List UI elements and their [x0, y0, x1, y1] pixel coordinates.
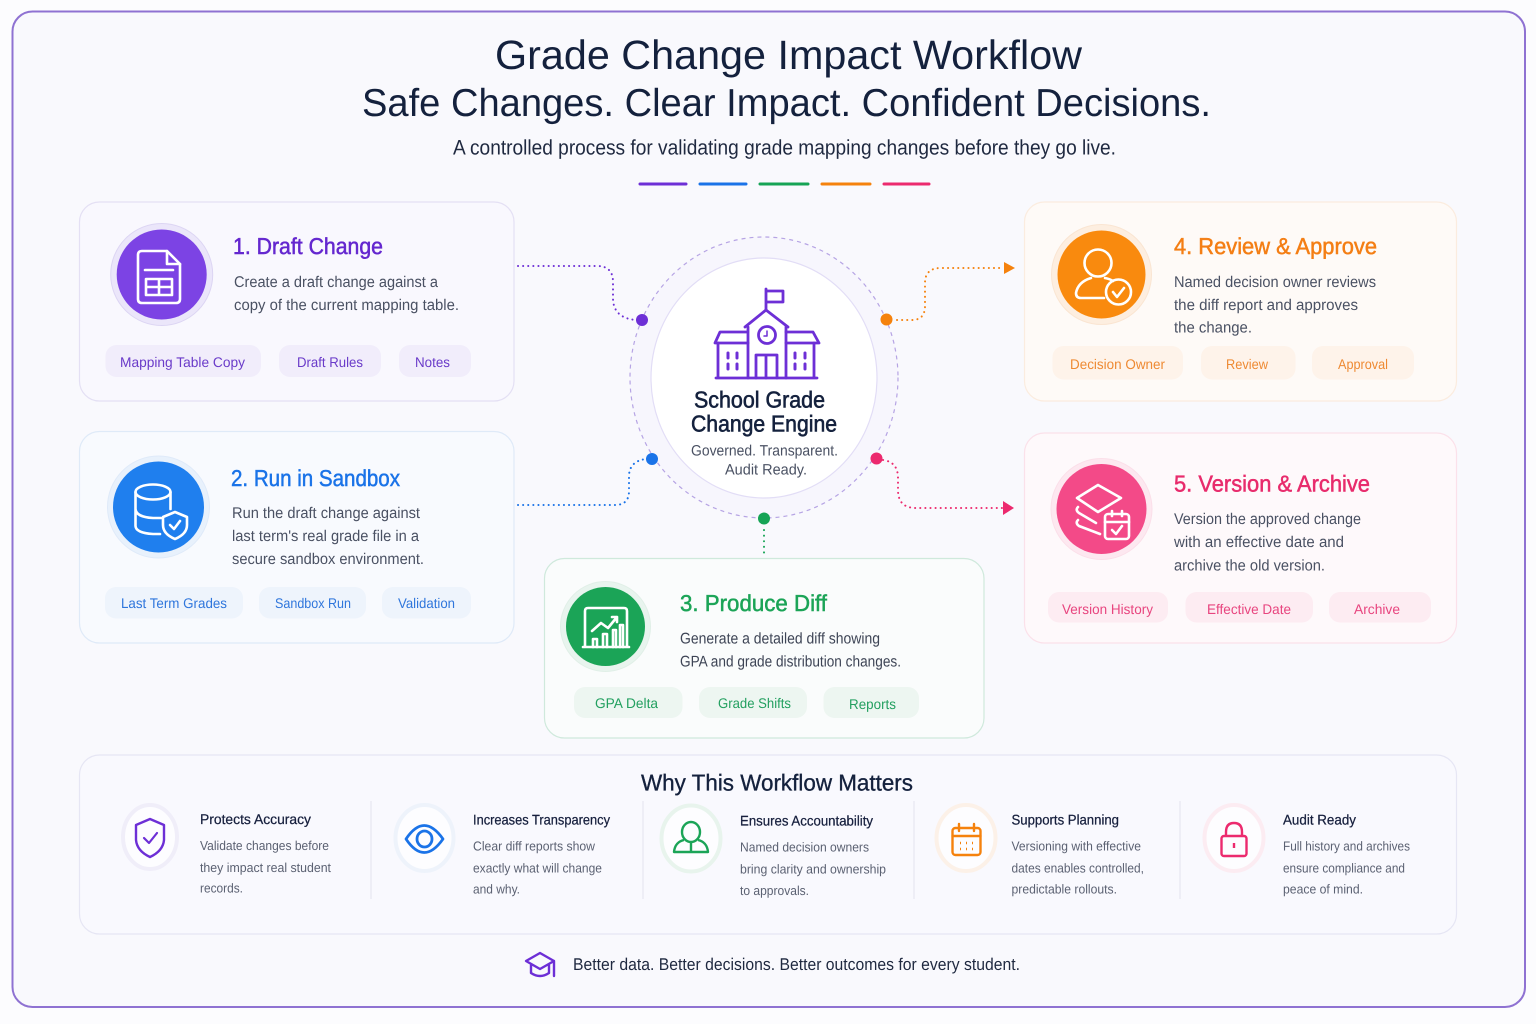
tags: Grade Shifts: [718, 695, 791, 711]
benefit: Increases Transparency: exactly what will change: [473, 860, 602, 876]
hub tagline: Governed. Transparent.: [691, 442, 838, 460]
description: [1174, 274, 1376, 336]
arrow: hub to Review & Approve: [880, 262, 1015, 326]
section heading: Why This Workflow Matters: [641, 770, 913, 796]
description: Create a draft change against a: [234, 274, 438, 291]
benefit: Supports Planning: predictable rollouts.: [1012, 882, 1117, 896]
panel: Why This Workflow Matters: [80, 755, 1456, 934]
icon: database with shield: [108, 456, 210, 558]
description: [680, 630, 901, 670]
tags: Approval: [1338, 356, 1388, 372]
description: Named decision owner reviews: [1174, 274, 1376, 291]
benefit: Protects Accuracy: Protects Accuracy: [200, 811, 311, 827]
title block: Safe Changes. Clear Impact. Confident Decisions.: [362, 82, 1211, 125]
title block: A controlled process for validating grade mapping changes before they go live.: [453, 136, 1116, 160]
panel: 1. Draft Change: [80, 202, 514, 401]
hub title: Change Engine: [691, 410, 837, 436]
description: Run the draft change against: [232, 505, 421, 522]
tags: Sandbox Run: [275, 595, 351, 611]
benefit: Increases Transparency: [396, 805, 610, 896]
benefit: Ensures Accountability: Named decision owners: [740, 840, 869, 854]
description: last term's real grade file in a: [232, 528, 419, 545]
hub title: [691, 386, 837, 436]
heading: 3. Produce Diff: [680, 590, 828, 616]
benefit: Ensures Accountability: Ensures Accountability: [740, 812, 873, 828]
tags: Reports: [849, 696, 896, 712]
tags: [106, 345, 471, 377]
benefit: Ensures Accountability: bring clarity and ownership: [740, 862, 886, 876]
tags: Last Term Grades: [121, 595, 227, 611]
benefit: Ensures Accountability: [662, 806, 886, 898]
center hub: School Grade Change Engine: [630, 237, 898, 518]
description: the diff report and approves: [1174, 297, 1358, 314]
description: Version the approved change: [1174, 511, 1361, 528]
description: copy of the current mapping table.: [234, 297, 459, 314]
benefit: Supports Planning: Versioning with effective: [1012, 838, 1141, 854]
description: GPA and grade distribution changes.: [680, 654, 901, 670]
tags: Effective Date: [1207, 601, 1291, 617]
panel: 4. Review & Approve: [1024, 202, 1456, 401]
benefit: Audit Ready: ensure compliance and: [1283, 860, 1405, 876]
tags: Notes: [415, 354, 450, 370]
description: [1173, 511, 1361, 574]
colored accent dashes: [640, 182, 929, 186]
description: archive the old version.: [1174, 558, 1325, 574]
benefit: Protects Accuracy: they impact real student: [200, 860, 331, 875]
icon: person with check: [1052, 224, 1152, 324]
benefit: Protects Accuracy: Validate changes before: [200, 838, 329, 853]
heading: 2. Run in Sandbox: [231, 465, 400, 491]
benefit: Increases Transparency: Increases Transparency: [473, 812, 610, 828]
icon: document with table: [111, 224, 213, 326]
panel: 2. Run in Sandbox: [80, 432, 514, 643]
heading: 4. Review & Approve: [1174, 233, 1377, 259]
benefit: Supports Planning: Supports Planning: [1012, 812, 1119, 828]
description: Generate a detailed diff showing: [680, 630, 880, 648]
tags: Archive: [1354, 601, 1400, 617]
icon: layers with calendar: [1051, 458, 1152, 560]
benefit: Increases Transparency: Clear diff reports show: [473, 838, 596, 854]
icon: school building: [715, 289, 819, 378]
panel: 3. Produce Diff: [544, 558, 984, 738]
benefit: Supports Planning: dates enables controlled,: [1012, 860, 1144, 876]
tags: [574, 687, 919, 718]
description: [232, 505, 424, 568]
heading: 1. Draft Change: [233, 233, 383, 259]
icon: chart on monitor: [560, 582, 650, 672]
tags: Version History: [1062, 601, 1153, 617]
benefit: Protects Accuracy: records.: [200, 880, 243, 896]
benefit: Audit Ready: [1204, 805, 1410, 896]
connector: hub to Run in Sandbox: [518, 453, 658, 505]
benefit: Audit Ready: peace of mind.: [1283, 882, 1363, 896]
arrow: hub to Version & Archive: [870, 452, 1014, 515]
hub tagline: Audit Ready.: [725, 462, 807, 478]
benefit: Supports Planning: [936, 805, 1144, 896]
title block: [362, 32, 1211, 160]
hub tagline: [691, 442, 838, 478]
tags: Mapping Table Copy: [120, 354, 245, 370]
tags: Draft Rules: [297, 354, 363, 370]
benefit: Protects Accuracy: [123, 805, 331, 896]
description: [234, 274, 459, 314]
description: secure sandbox environment.: [232, 551, 424, 568]
connector: hub to Draft Change: [518, 266, 648, 326]
benefit: Audit Ready: Full history and archives: [1283, 838, 1410, 854]
description: with an effective date and: [1173, 534, 1344, 551]
title block: Grade Change Impact Workflow: [495, 32, 1082, 78]
footer tagline with graduation cap icon: Better data. Better decisions. Better outcomes for every student.: [573, 955, 1020, 974]
benefit: Increases Transparency: and why.: [473, 882, 520, 896]
tags: Validation: [398, 595, 455, 611]
tags: GPA Delta: [595, 695, 658, 711]
tags: Decision Owner: [1070, 356, 1165, 372]
tags: Review: [1226, 356, 1269, 372]
tags: [1052, 346, 1414, 380]
benefit: Ensures Accountability: to approvals.: [740, 883, 809, 898]
tags: [105, 587, 471, 618]
tags: [1048, 592, 1431, 622]
heading: 5. Version & Archive: [1174, 470, 1370, 496]
benefit: Audit Ready: Audit Ready: [1283, 812, 1356, 828]
panel: 5. Version & Archive: [1024, 433, 1456, 643]
connector: hub to Produce Diff: [758, 512, 770, 556]
description: the change.: [1174, 320, 1252, 336]
hub title: School Grade: [694, 386, 825, 412]
